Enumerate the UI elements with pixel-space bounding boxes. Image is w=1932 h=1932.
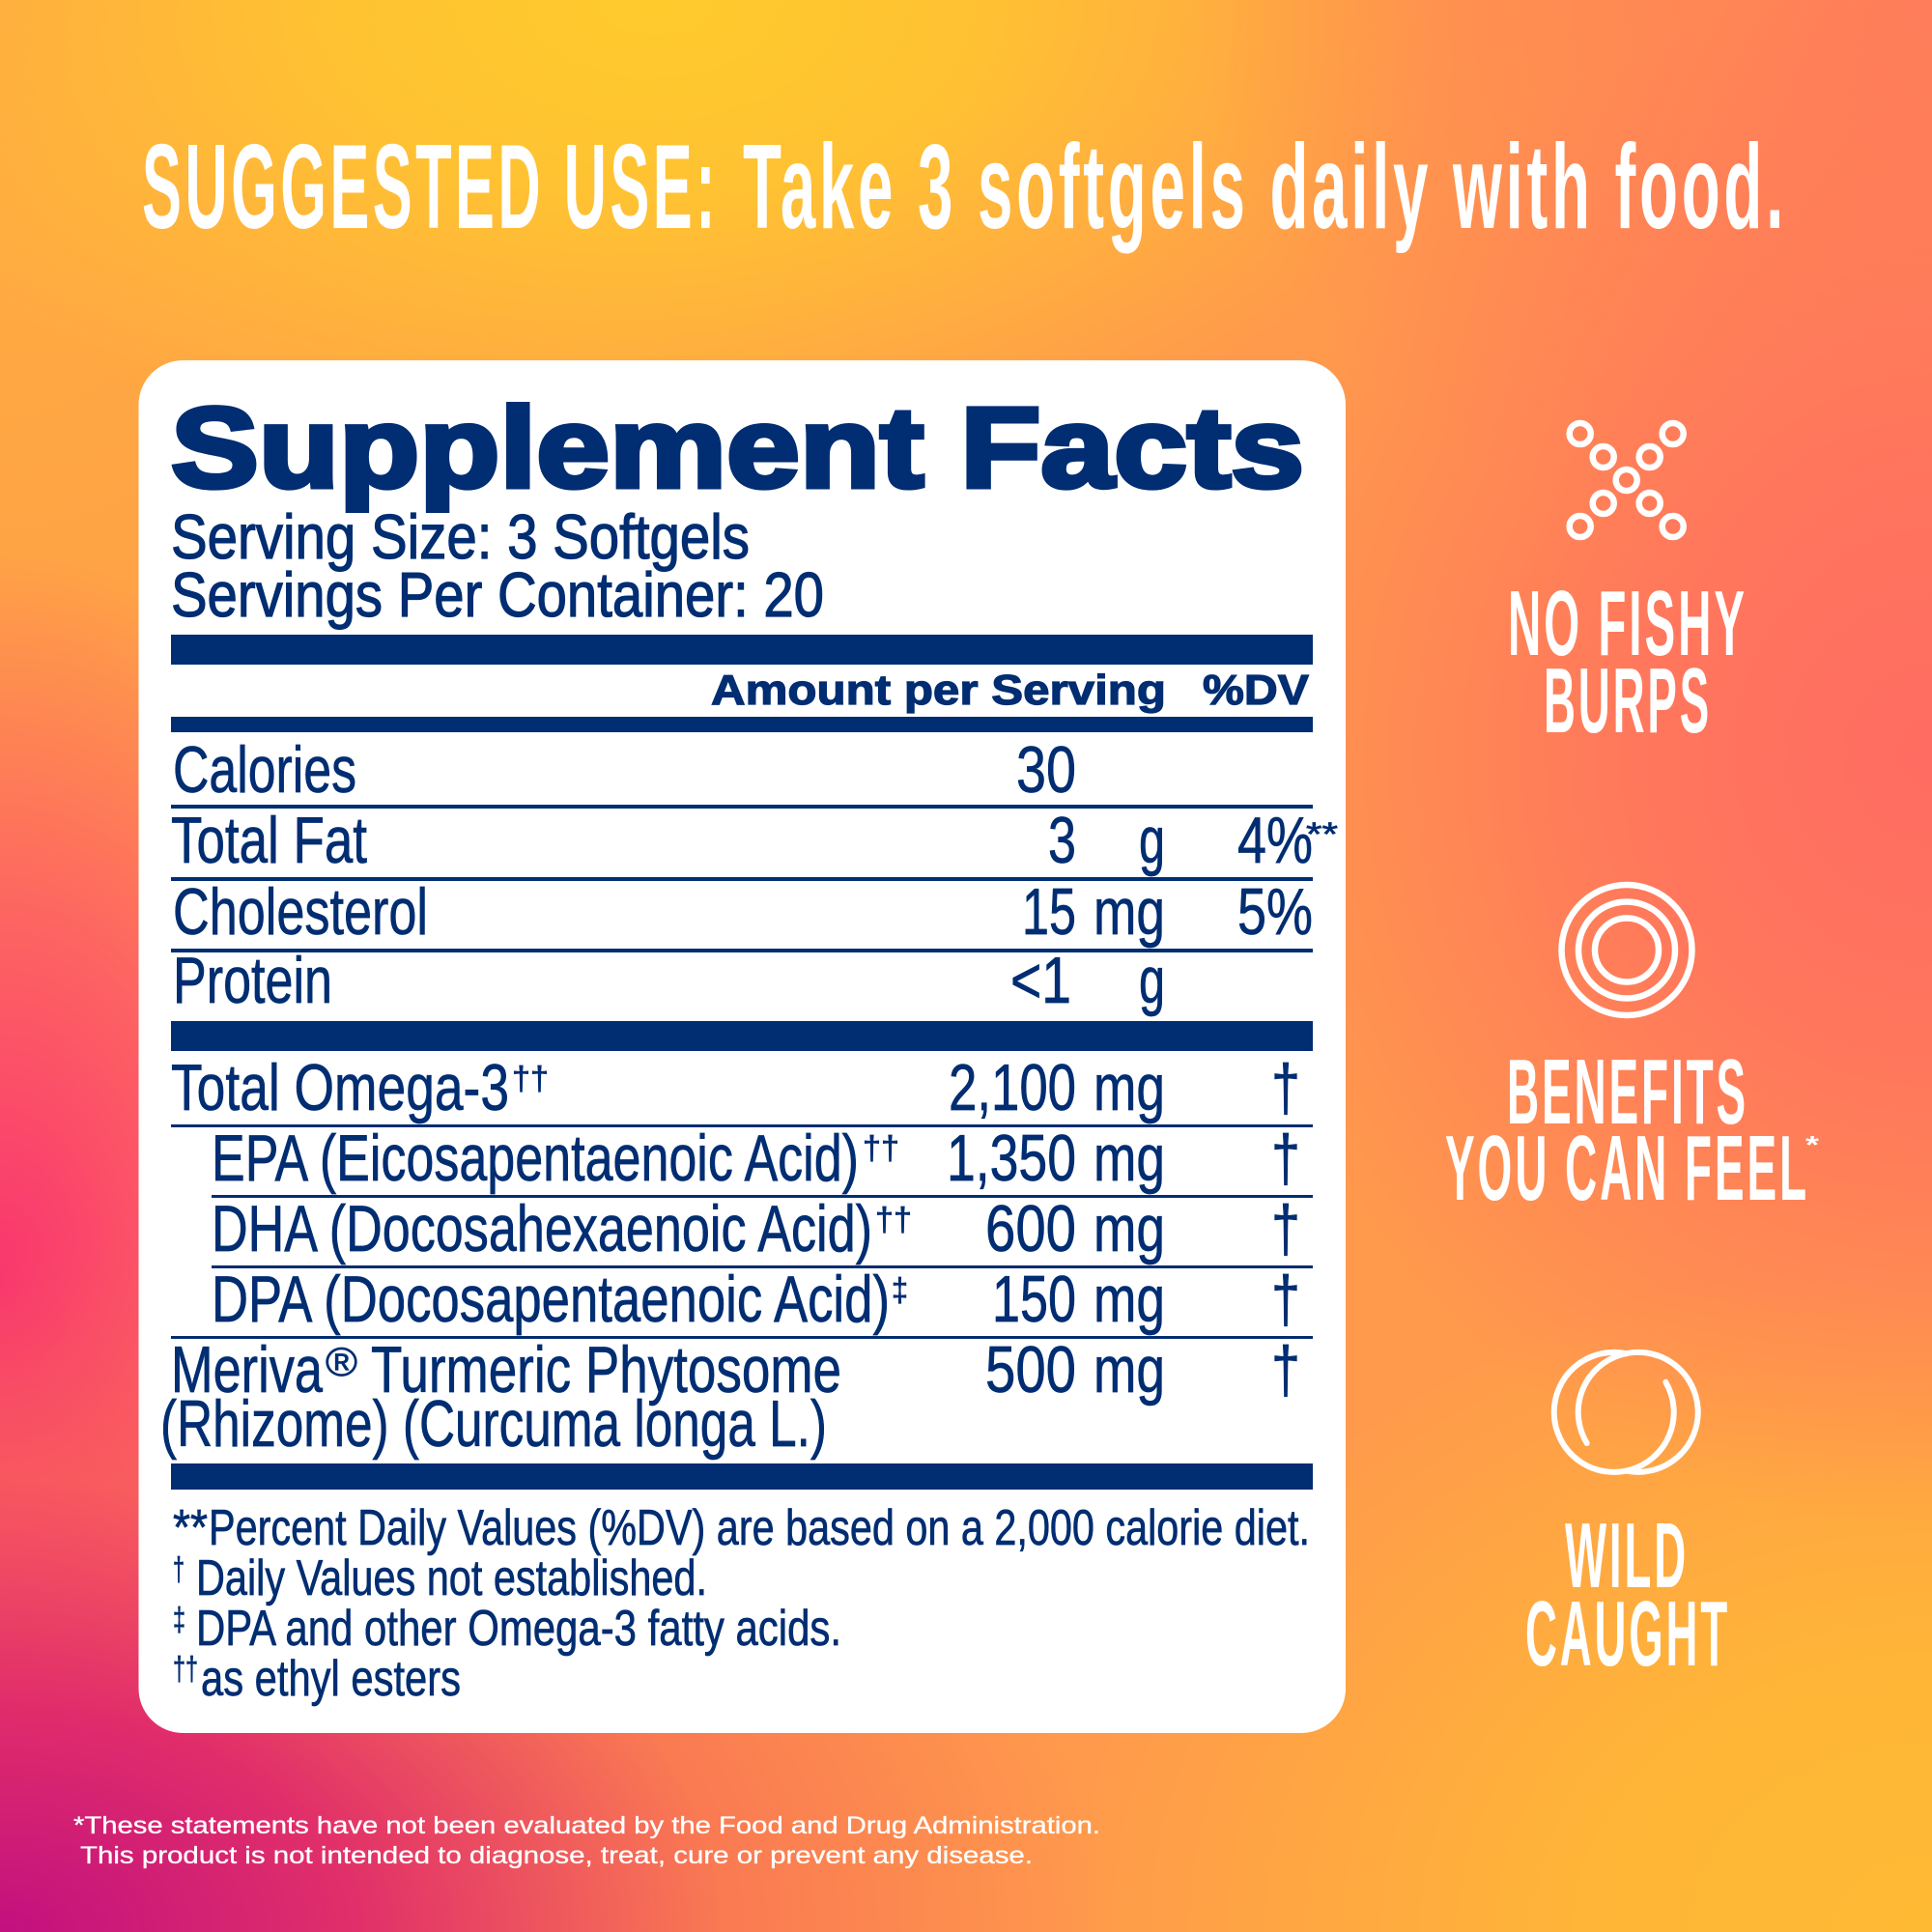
table rules: [171, 635, 1313, 1490]
footnotes: as ethyl esters: [201, 1651, 461, 1707]
footnotes: †: [173, 1551, 185, 1588]
row: dpa: mg: [1094, 1263, 1165, 1336]
row: epa: mg: [1094, 1122, 1165, 1195]
row: cholesterol: 5%: [1237, 875, 1313, 949]
row: calories: 30: [1016, 733, 1076, 807]
row: calories: [173, 733, 1076, 807]
label: benefits you can feel: *: [1805, 1130, 1820, 1159]
heading: supplement facts: Supplement Facts: [171, 384, 1304, 512]
row: epa: EPA (Eicosapentaenoic Acid): [212, 1122, 859, 1195]
column headers: %DV: [1203, 667, 1310, 714]
row: total fat: g: [1139, 804, 1165, 877]
row: dha: DHA (Docosahexaenoic Acid): [212, 1192, 872, 1265]
footnotes: Daily Values not established.: [196, 1550, 707, 1606]
row: meriva turmeric: Meriva: [171, 1333, 323, 1406]
row: cholesterol: [173, 875, 1313, 949]
row: epa: †: [1271, 1122, 1300, 1195]
row: total omega-3: mg: [1094, 1051, 1165, 1124]
row: meriva turmeric: mg: [1094, 1333, 1165, 1406]
row: cholesterol: 15: [1022, 875, 1076, 949]
row: total omega-3: †: [1271, 1051, 1300, 1124]
label: wild caught: WILD: [1565, 1504, 1689, 1607]
row: dpa: †: [1271, 1263, 1300, 1336]
column headers: Amount per Serving: [711, 667, 1166, 714]
row: total fat: Total Fat: [171, 804, 367, 877]
row: total omega-3: Total Omega-3: [171, 1051, 509, 1124]
row: meriva turmeric: Turmeric Phytosome: [371, 1333, 841, 1406]
serving information: Serving Size: 3 Softgels: [171, 501, 750, 572]
disclaimer: *These statements have not been evaluated by the Food and Drug Administration.: [73, 1812, 1100, 1839]
row: epa: 1,350: [947, 1122, 1076, 1195]
footnotes: **: [173, 1500, 208, 1556]
row: cholesterol: Cholesterol: [173, 875, 428, 949]
row: meriva turmeric: [160, 1333, 1300, 1461]
row: dpa: ‡: [892, 1272, 908, 1309]
row: meriva turmeric: (Rhizome) (Curcuma longa L.): [160, 1387, 827, 1461]
label: wild caught: [1525, 1504, 1730, 1686]
row: total omega-3: ††: [512, 1061, 549, 1097]
row: total omega-3: 2,100: [949, 1051, 1076, 1124]
footnotes: ††: [173, 1651, 198, 1688]
footnotes: [173, 1500, 1310, 1707]
footnotes: DPA and other Omega-3 fatty acids.: [196, 1601, 841, 1657]
icon: benefits rings: [1561, 885, 1692, 1015]
row: total fat: [171, 804, 1338, 877]
row: meriva turmeric: 500: [985, 1333, 1076, 1406]
row: meriva turmeric: ®: [326, 1339, 357, 1384]
row: dha: ††: [875, 1202, 912, 1238]
row: protein: [173, 944, 1165, 1017]
row: dpa: 150: [992, 1263, 1076, 1336]
row: total omega-3: [171, 1051, 1300, 1124]
row: dha: mg: [1094, 1192, 1165, 1265]
row: epa: ††: [863, 1130, 899, 1167]
row: protein: Protein: [173, 944, 332, 1017]
serving information: [171, 501, 824, 630]
label: benefits you can feel: [1445, 1040, 1820, 1220]
label: no fishy burps: BURPS: [1544, 649, 1712, 753]
row: cholesterol: mg: [1094, 875, 1165, 949]
row: protein: g: [1139, 944, 1165, 1017]
disclaimer: This product is not intended to diagnose, treat, cure or prevent any disease.: [80, 1842, 1033, 1869]
row: protein: <1: [1010, 944, 1071, 1017]
row: calories: Calories: [173, 733, 356, 807]
row: total fat: 3: [1048, 804, 1076, 877]
label: no fishy burps: [1508, 572, 1747, 753]
column headers: [711, 667, 1310, 714]
row: meriva turmeric: †: [1271, 1333, 1300, 1406]
row: dha: 600: [985, 1192, 1076, 1265]
icon: no fishy burps: [1570, 423, 1684, 537]
footnotes: ‡: [173, 1602, 185, 1638]
row: dpa: DPA (Docosapentaenoic Acid): [212, 1263, 890, 1336]
panel: supplement facts: [139, 360, 1346, 1733]
row: total fat: 4%: [1237, 804, 1313, 877]
row: dha: †: [1271, 1192, 1300, 1265]
title: suggested use: SUGGESTED USE:: [142, 121, 719, 254]
footnotes: Percent Daily Values (%DV) are based on a 2,000 calorie diet.: [209, 1500, 1310, 1556]
row: total fat: **: [1306, 816, 1338, 853]
disclaimer: [73, 1812, 1100, 1869]
icon: wild caught softgels: [1554, 1352, 1698, 1472]
serving information: Servings Per Container: 20: [171, 559, 824, 630]
